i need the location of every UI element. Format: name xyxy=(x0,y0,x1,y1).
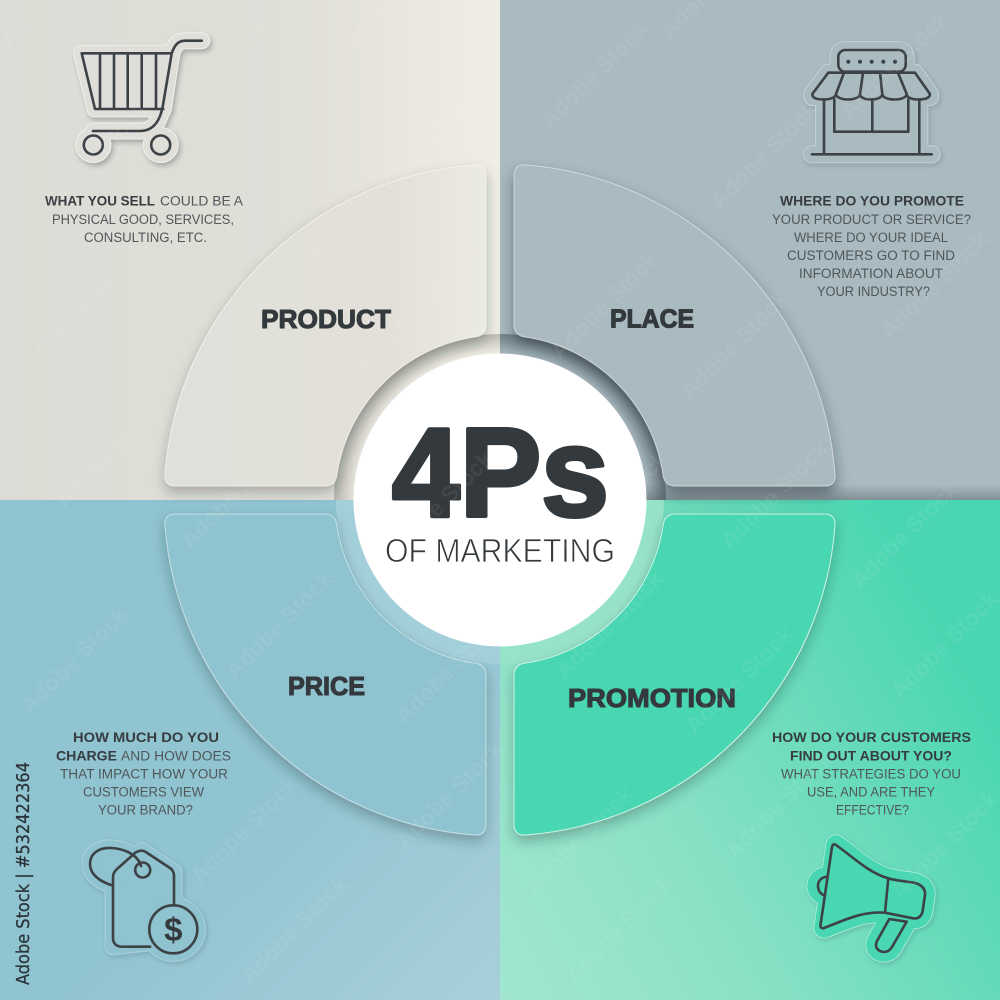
watermark pattern: Adobe Stock xyxy=(720,746,838,864)
text block: promotion: EFFECTIVE? xyxy=(836,802,909,818)
text block: place: INFORMATION ABOUT xyxy=(799,266,943,281)
text block: price: HOW MUCH DO YOU xyxy=(73,730,219,745)
background quadrant: place xyxy=(500,0,1000,500)
center circle xyxy=(354,354,646,646)
text block: product: COULD BE A xyxy=(160,194,243,208)
heading: place: PLACE xyxy=(610,304,694,334)
watermark pattern: Adobe Stock xyxy=(545,246,663,364)
watermark pattern: Adobe Stock xyxy=(535,16,653,134)
watermark pattern: Adobe Stock xyxy=(175,436,293,554)
heading: product: PRODUCT xyxy=(261,304,391,334)
watermark pattern: Adobe Stock xyxy=(220,566,338,684)
watermark pattern: Adobe Stock xyxy=(50,396,168,514)
dollar sign: $ xyxy=(164,911,182,948)
stock credit: Adobe Stock | #532422364 xyxy=(13,762,34,985)
watermark pattern: Adobe Stock xyxy=(380,446,498,564)
watermark pattern: Adobe Stock xyxy=(375,76,493,194)
heading: promotion: PROMOTION xyxy=(568,683,736,713)
ring shadow: product side xyxy=(334,334,500,500)
light ring: price side xyxy=(336,500,500,664)
text block: promotion: HOW DO YOUR CUSTOMERS xyxy=(772,730,971,745)
icon: shopping cart xyxy=(82,41,202,155)
ring shadow: place side xyxy=(500,334,666,500)
text block: place xyxy=(772,194,971,299)
text block: price xyxy=(56,730,231,818)
text block: place: WHERE DO YOUR IDEAL xyxy=(794,230,948,245)
watermark pattern: Adobe Stock xyxy=(875,226,993,344)
watermark pattern: Adobe Stock xyxy=(390,736,508,854)
text block: price: YOUR BRAND? xyxy=(98,802,193,818)
watermark pattern: Adobe Stock xyxy=(520,781,638,899)
text block: place: WHERE DO YOU PROMOTE xyxy=(780,194,964,208)
text block: price: CUSTOMERS VIEW xyxy=(83,784,204,800)
watermark pattern: Adobe Stock xyxy=(835,6,953,124)
heading: price: PRICE xyxy=(288,671,365,701)
subtitle: of marketing: OF MARKETING xyxy=(385,533,615,570)
text block: price: THAT IMPACT HOW YOUR xyxy=(60,766,228,782)
watermark pattern: Adobe Stock xyxy=(885,586,1000,704)
text block: promotion: USE, AND ARE THEY xyxy=(807,784,935,800)
watermark pattern: Adobe Stock xyxy=(155,16,273,134)
watermark pattern: Adobe Stock xyxy=(235,871,353,989)
watermark pattern: Adobe Stock xyxy=(680,621,798,739)
watermark pattern: Adobe Stock xyxy=(390,611,508,729)
panel: place xyxy=(514,165,835,486)
watermark pattern: Adobe Stock xyxy=(35,96,153,214)
watermark pattern: Adobe Stock xyxy=(335,276,453,394)
background quadrant: product xyxy=(0,0,500,500)
icon: price tag xyxy=(90,848,197,953)
text block: place: CUSTOMERS GO TO FIND xyxy=(787,248,955,263)
text block: price: AND HOW DOES xyxy=(121,748,231,764)
watermark pattern: Adobe Stock xyxy=(185,771,303,889)
watermark pattern: Adobe Stock xyxy=(845,476,963,594)
icon: storefront xyxy=(812,50,932,154)
text block: place: YOUR PRODUCT OR SERVICE? xyxy=(772,212,971,227)
panel: promotion xyxy=(514,514,835,835)
shadow band under top quadrants xyxy=(500,484,1000,500)
watermark pattern: Adobe Stock xyxy=(715,436,833,554)
text block: promotion xyxy=(772,730,971,818)
text block: product: CONSULTING, ETC. xyxy=(84,230,207,245)
watermark pattern: Adobe Stock xyxy=(885,786,1000,904)
text block: place: YOUR INDUSTRY? xyxy=(817,284,930,299)
panel: price xyxy=(165,514,486,835)
text block: promotion: FIND OUT ABOUT YOU? xyxy=(790,748,952,764)
panel: product xyxy=(165,165,486,486)
icon: megaphone xyxy=(817,844,925,952)
text block: product: WHAT YOU SELL xyxy=(45,194,155,208)
watermark pattern: Adobe Stock xyxy=(560,871,678,989)
watermark pattern: Adobe Stock xyxy=(675,286,793,404)
text block: product: PHYSICAL GOOD, SERVICES, xyxy=(52,212,234,227)
text block: promotion: WHAT STRATEGIES DO YOU xyxy=(781,766,961,782)
text block: product xyxy=(45,194,243,245)
watermark pattern: Adobe Stock xyxy=(15,601,133,719)
title: 4Ps: 4Ps xyxy=(392,402,609,543)
background quadrant: price xyxy=(0,500,500,1000)
watermark pattern: Adobe Stock xyxy=(550,566,668,684)
watermark pattern: Adobe Stock xyxy=(5,266,123,384)
watermark pattern: Adobe Stock xyxy=(555,446,673,564)
light ring: promotion side xyxy=(500,500,664,664)
watermark pattern: Adobe Stock xyxy=(210,236,328,354)
background quadrant: promotion xyxy=(500,500,1000,1000)
watermark pattern: Adobe Stock xyxy=(705,96,823,214)
text block: price: CHARGE xyxy=(56,748,117,764)
